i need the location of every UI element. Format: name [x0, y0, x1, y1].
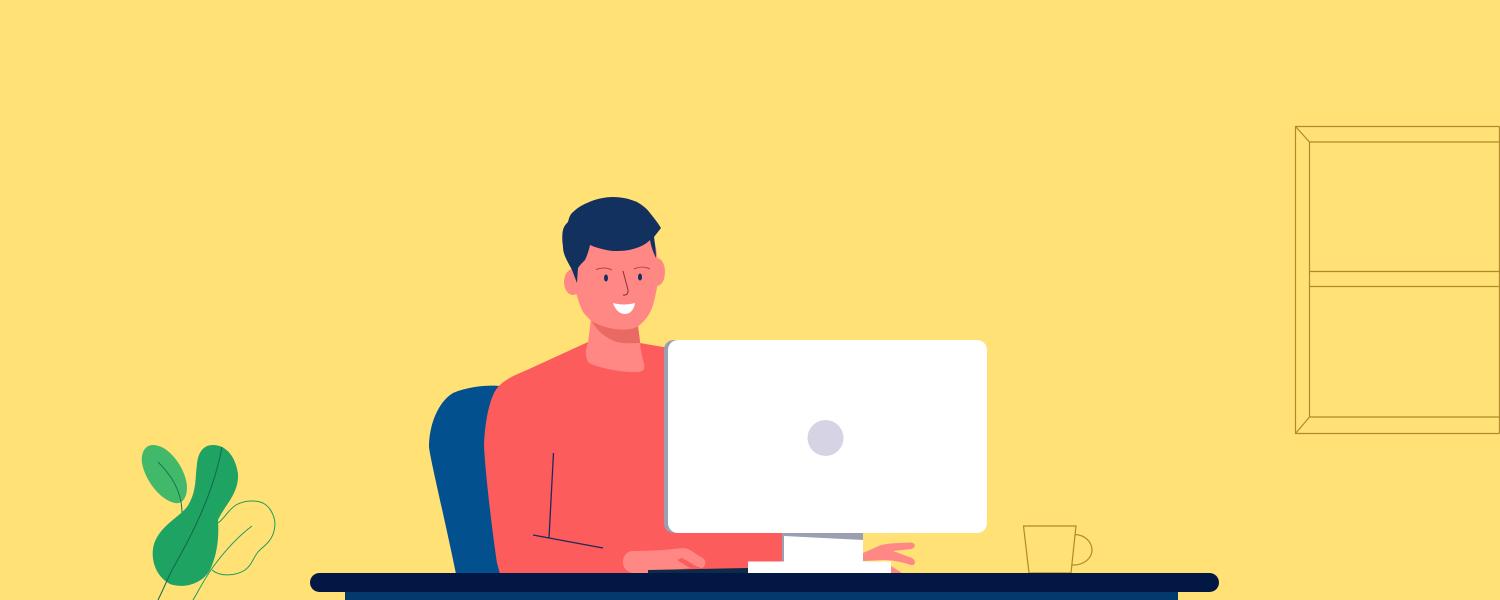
plant	[142, 445, 275, 600]
monitor side edge	[664, 340, 690, 533]
outline leaf	[193, 501, 275, 600]
large green leaf	[153, 445, 238, 586]
monitor logo	[808, 420, 844, 456]
window frame outline	[1296, 126, 1500, 434]
stand neck	[784, 536, 863, 563]
torso in red sweater	[484, 342, 790, 574]
right eye	[638, 274, 642, 280]
large leaf vein	[158, 447, 222, 600]
monitor	[664, 340, 987, 574]
desk top	[310, 573, 1219, 592]
monitor back	[668, 340, 987, 533]
face	[572, 235, 658, 330]
keyboard edge	[648, 568, 748, 574]
right ear	[649, 258, 665, 286]
arm fold lines	[533, 453, 603, 548]
desk	[310, 573, 1219, 600]
stand base	[748, 562, 891, 574]
fingers	[863, 542, 915, 565]
head and neck	[562, 197, 665, 372]
neck shadow	[591, 315, 640, 343]
lower finger	[891, 566, 902, 573]
stand shadow	[782, 533, 863, 562]
chair	[429, 386, 505, 574]
mug body	[1024, 526, 1076, 573]
nose	[623, 271, 628, 295]
neck	[586, 318, 644, 372]
hair	[562, 197, 661, 283]
left hand	[623, 548, 705, 574]
desk underside	[345, 590, 1178, 600]
eyebrows	[596, 267, 650, 270]
coffee mug	[1024, 526, 1092, 573]
left eye	[604, 274, 608, 282]
smile	[613, 303, 635, 314]
mug handle	[1072, 534, 1092, 565]
leaf vein	[158, 462, 182, 513]
right hand	[863, 542, 915, 573]
left ear	[564, 269, 582, 295]
light green leaf	[142, 445, 187, 503]
